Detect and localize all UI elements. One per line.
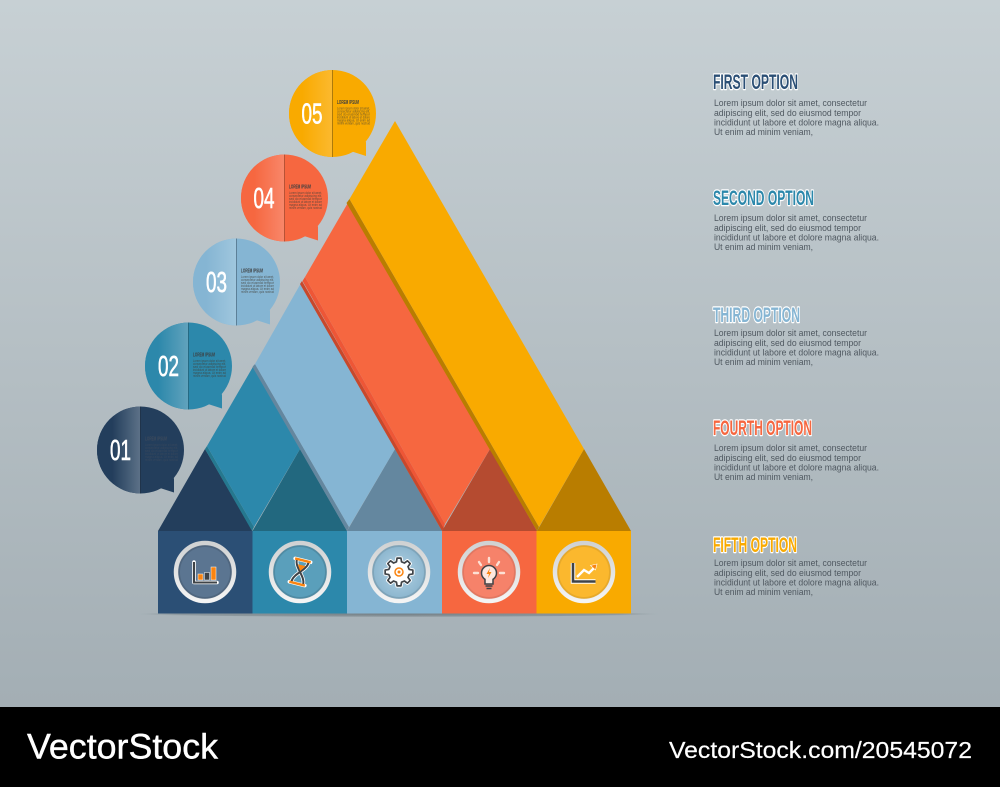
bubble 01: minim veniam, quis nostrud [145, 458, 178, 462]
footer bar [0, 707, 1000, 787]
text block: second option: incididunt ut labore et dolore magna aliqua. [714, 232, 879, 242]
bubble 05 [289, 70, 376, 157]
bubble 01: Lorem ipsum dolor sit amet, [145, 443, 178, 447]
bubble 04: minim veniam, quis nostrud [289, 206, 322, 210]
bubble 01: sed do eiusmod tempor [145, 449, 179, 453]
text block: fourth option [713, 417, 879, 482]
icon: bar chart [176, 543, 234, 601]
bubble 02: consectetur adipiscing elit, [193, 362, 226, 366]
bubble 05: Lorem ipsum dolor sit amet, [337, 106, 370, 110]
bubble 04 [241, 154, 328, 242]
base shadow [136, 611, 660, 617]
bubble 03: minim veniam, quis nostrud [241, 290, 274, 294]
band 3: light blue [252, 283, 395, 531]
text block: second option [713, 187, 879, 252]
text block: third option: THIRD OPTION [713, 304, 800, 327]
text block: fourth option: Ut enim ad minim veniam, [714, 472, 813, 482]
bubble 04: incididunt ut labore et dolore [289, 200, 322, 204]
bubble 04: consectetur adipiscing elit, [289, 194, 322, 198]
text block: first option: incididunt ut labore et dolore magna aliqua. [714, 118, 879, 128]
bubble 05: 05 [302, 98, 322, 130]
bubble 05: sed do eiusmod tempor [337, 112, 371, 116]
text block: third option: incididunt ut labore et dolore magna aliqua. [714, 348, 879, 358]
bubble 03: LOREM IPSUM [241, 268, 263, 274]
bubble 03: magna aliqua. Ut enim ad [241, 287, 274, 291]
bubble 05: incididunt ut labore et dolore [337, 116, 370, 120]
bubble 02: incididunt ut labore et dolore [193, 368, 226, 372]
text block: fourth option: adipiscing elit, sed do eiusmod tempor [714, 453, 861, 463]
bubble 04: magna aliqua. Ut enim ad [289, 203, 322, 207]
text block: fifth option: Ut enim ad minim veniam, [714, 587, 813, 597]
bubble 02: 02 [158, 351, 179, 383]
bubble 01 [97, 406, 184, 494]
text block: fourth option: incididunt ut labore et dolore magna aliqua. [714, 462, 879, 472]
bubble 03 [193, 238, 280, 326]
band 5: orange [346, 121, 584, 531]
bubble 01: 01 [110, 435, 131, 467]
bubble 03: Lorem ipsum dolor sit amet, [241, 275, 274, 279]
text block: fifth option: FIFTH OPTION [713, 534, 797, 557]
bubble 03: 03 [206, 267, 227, 299]
bubble 02: minim veniam, quis nostrud [193, 374, 226, 378]
text block: third option [713, 304, 879, 367]
bubble 04: Lorem ipsum dolor sit amet, [289, 191, 322, 195]
text block: fifth option: Lorem ipsum dolor sit amet, consectetur [714, 558, 867, 568]
bubble 04: LOREM IPSUM [289, 184, 311, 190]
text block: fourth option: FOURTH OPTION [713, 417, 812, 440]
bubble 05: magna aliqua. Ut enim ad [337, 118, 370, 122]
icon: growth chart [555, 543, 613, 601]
text block: first option: adipiscing elit, sed do eiusmod tempor [714, 108, 861, 118]
footer bar: VectorStock [27, 728, 219, 766]
bubble 03: sed do eiusmod tempor [241, 281, 275, 285]
bubble 01: LOREM IPSUM [145, 436, 167, 442]
bubble 04: 04 [254, 183, 274, 215]
bubble 02: sed do eiusmod tempor [193, 365, 227, 369]
bubble 03: consectetur adipiscing elit, [241, 278, 274, 282]
footer bar: VectorStock.com/20545072 [669, 737, 972, 763]
icon: hourglass [271, 543, 329, 601]
text block: fourth option: Lorem ipsum dolor sit amet, consectetur [714, 443, 867, 453]
bubble 02: LOREM IPSUM [193, 352, 215, 358]
bubble 03: incididunt ut labore et dolore [241, 284, 274, 288]
text block: first option [713, 71, 879, 137]
text block: fifth option: incididunt ut labore et dolore magna aliqua. [714, 578, 879, 588]
text block: first option: Ut enim ad minim veniam, [714, 127, 813, 137]
text block: second option: Ut enim ad minim veniam, [714, 242, 813, 252]
text block: second option: adipiscing elit, sed do eiusmod tempor [714, 223, 861, 233]
bubble 05: consectetur adipiscing elit, [337, 110, 370, 114]
text block: fifth option [713, 534, 879, 597]
text block: first option: Lorem ipsum dolor sit amet, consectetur [714, 98, 867, 108]
text block: fifth option: adipiscing elit, sed do eiusmod tempor [714, 568, 861, 578]
text block: first option: FIRST OPTION [713, 71, 798, 94]
band 2: teal [205, 365, 300, 531]
dark triangles [158, 449, 631, 531]
icon: light bulb [460, 543, 518, 601]
pyramid chart [158, 121, 631, 614]
text block: third option: Ut enim ad minim veniam, [714, 357, 813, 367]
bubble 01: magna aliqua. Ut enim ad [145, 455, 178, 459]
bubble 02: Lorem ipsum dolor sit amet, [193, 359, 226, 363]
bubble 05: LOREM IPSUM [337, 100, 359, 106]
bubble 01: consectetur adipiscing elit, [145, 446, 178, 450]
bubble 04: sed do eiusmod tempor [289, 197, 323, 201]
base columns [158, 531, 631, 614]
bubble 01: incididunt ut labore et dolore [145, 452, 178, 456]
band 4: red [300, 201, 490, 531]
text block: second option: SECOND OPTION [713, 187, 814, 210]
bubble 05: minim veniam, quis nostrud [337, 122, 370, 126]
text block: third option: Lorem ipsum dolor sit amet, consectetur [714, 328, 867, 338]
bubble 02 [145, 322, 232, 410]
icon: gear [370, 543, 428, 601]
text block: second option: Lorem ipsum dolor sit amet, consectetur [714, 213, 867, 223]
bubble 02: magna aliqua. Ut enim ad [193, 371, 226, 375]
text block: third option: adipiscing elit, sed do eiusmod tempor [714, 338, 861, 348]
